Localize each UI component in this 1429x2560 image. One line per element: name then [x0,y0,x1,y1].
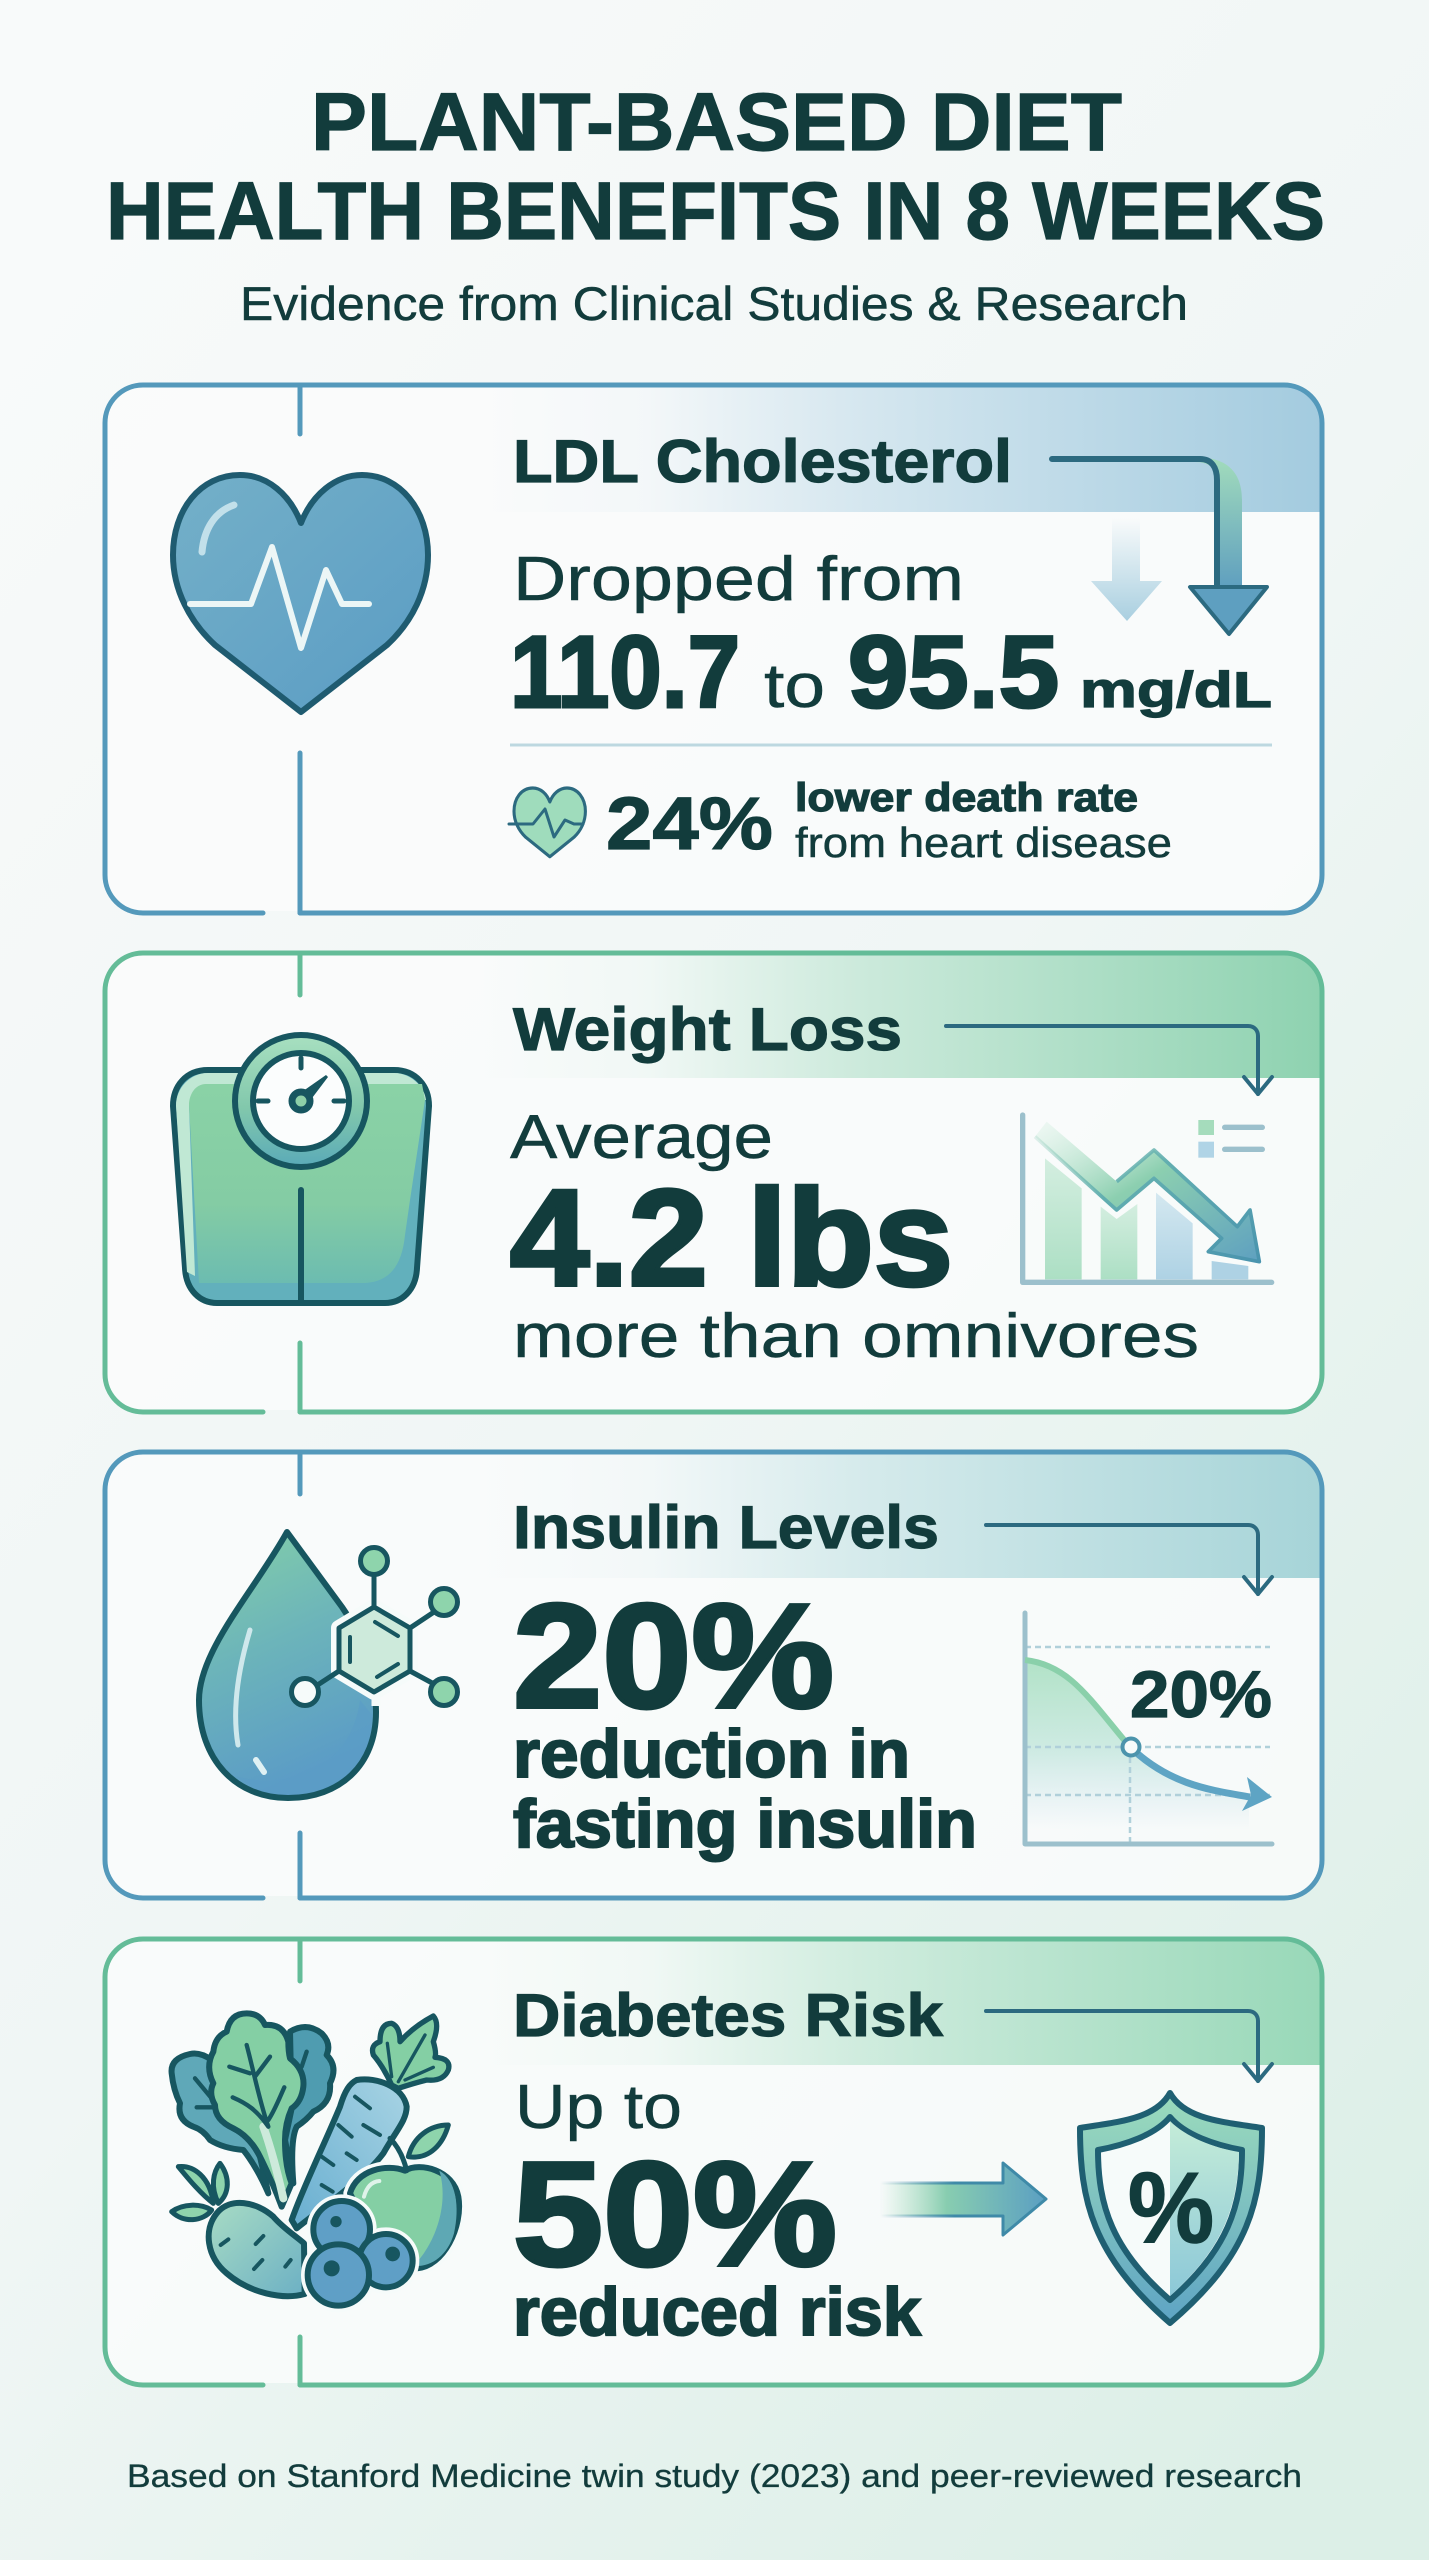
icon: carrot [372,2016,449,2088]
heading: Diabetes Risk: Diabetes Risk [513,1982,944,2049]
value: 110.7 to 95.5 mg/dL [510,615,1272,729]
icon: bathroom scale [173,1035,429,1303]
text: Up to: Up to [515,2073,682,2142]
arrow: weight heading arrow [946,1026,1272,1094]
text: Average: Average [510,1103,773,1172]
value: 110.7 to 95.5 mg/dL: mg/dL [1080,662,1272,718]
value: 110.7 to 95.5 mg/dL: to [764,652,825,721]
text: more than omnivores: more than omnivores [513,1302,1199,1371]
icon: cucumber [209,2203,305,2296]
panel: insulin levels [105,1452,1322,1898]
stat: 24% lower death rate: lower death rate [795,776,1138,820]
text: reduced risk: reduced risk [513,2274,921,2350]
arrow: faint down arrow [1091,518,1162,621]
icon: apple [350,2167,459,2268]
title [106,77,1325,257]
text: reduction in fasting insulin [513,1716,977,1862]
panel: LDL cholesterol [105,385,1322,913]
title: HEALTH BENEFITS IN 8 WEEKS [106,166,1325,257]
value: 50%: 50% [513,2132,837,2297]
panel: weight loss [105,953,1322,1412]
icon: vegetables and fruit [172,2013,459,2306]
subtitle: Evidence from Clinical Studies & Research [240,277,1188,330]
arrow: insulin heading arrow [986,1525,1272,1594]
arrow: big down arrow [1052,457,1267,634]
icon: blueberries [308,2201,413,2306]
icon: heart with pulse [173,475,428,712]
stat: 24% lower death rate [606,776,1172,866]
chart: weight bars with down arrow [1023,1115,1272,1282]
icon: small leaves [172,2163,227,2220]
icon: percent shield [1080,2093,1262,2323]
icon: insulin drop and molecule [199,1532,458,1798]
arrow: gradient right arrow [880,2163,1046,2235]
value: 20%: 20% [513,1574,834,1739]
icon: back leaves [172,2027,333,2193]
heading: Weight Loss: Weight Loss [513,996,902,1063]
value: 110.7 to 95.5 mg/dL: 110.7 [510,615,740,729]
text: Dropped from: Dropped from [513,545,964,614]
heading: Insulin Levels: Insulin Levels [513,1494,939,1561]
value: 4.2 lbs: 4.2 lbs [510,1162,953,1315]
stat: 24% lower death rate: 24% [606,782,773,865]
footer source note: Based on Stanford Medicine twin study (2023) and peer-reviewed research [127,2458,1302,2494]
heading: LDL Cholesterol: LDL Cholesterol [513,428,1012,495]
chart: insulin curve [1025,1613,1272,1844]
text: reduction in fasting insulin: fasting insulin [513,1786,977,1862]
arrow: diabetes heading arrow [986,2011,1272,2081]
text: reduction in fasting insulin: reduction in [513,1716,910,1792]
icon: small heart [509,788,585,857]
panel: diabetes risk [105,1939,1322,2385]
stat: 24% lower death rate: from heart disease [795,819,1172,866]
icon: percent shield: % [1128,2152,1214,2264]
icon: front lettuce leaf [209,2013,303,2207]
value: 110.7 to 95.5 mg/dL: 95.5 [848,615,1059,729]
title: PLANT-BASED DIET [311,77,1122,168]
chart: insulin curve: 20% [1130,1657,1272,1731]
